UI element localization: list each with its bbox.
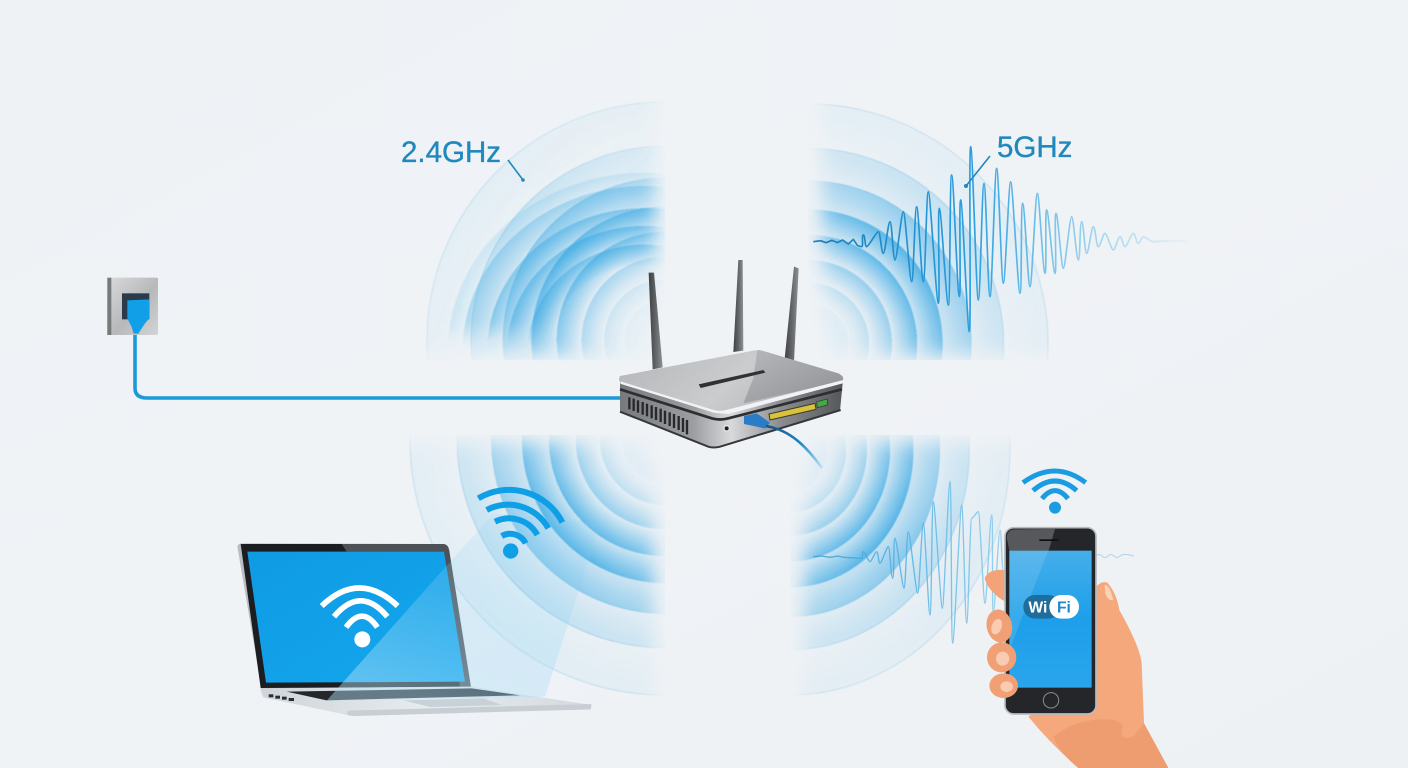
router green port — [817, 399, 827, 408]
laptop keyboard — [287, 688, 520, 700]
phone screen — [1009, 551, 1092, 688]
faint waveform tail right of phone — [1096, 554, 1134, 558]
Wi-Fi badge: Wi — [1028, 600, 1047, 617]
wifi icon above phone — [1023, 471, 1086, 514]
phone home button — [1043, 693, 1059, 708]
top finger — [985, 570, 1007, 603]
laptop ports — [269, 694, 294, 701]
laptop wifi icon — [322, 588, 398, 647]
floating wifi icon — [478, 490, 562, 559]
label: 2.4GHz: 2.4GHz — [401, 136, 501, 169]
router power socket — [723, 425, 730, 432]
phone-side signal arcs — [791, 435, 1011, 695]
router — [619, 260, 843, 447]
leader line: 2.4GHz — [508, 160, 525, 182]
router blue plug — [744, 413, 770, 429]
laptop-side signal arcs — [409, 435, 665, 696]
router top slot — [699, 370, 765, 388]
label: 5GHz: 5GHz — [997, 131, 1072, 164]
hand and thumb — [1028, 582, 1168, 768]
2.4GHz signal arcs — [426, 102, 665, 360]
Wi-Fi badge: Fi — [1057, 600, 1071, 617]
thumb nail — [1105, 585, 1113, 600]
label: 2.4GHz — [401, 136, 525, 182]
ethernet cable to wall — [135, 332, 622, 398]
Wi-Fi badge — [1023, 595, 1079, 619]
label: 5GHz — [964, 131, 1072, 188]
light beam from laptop — [327, 513, 600, 701]
phone speaker — [1039, 539, 1059, 541]
laptop lid — [237, 543, 471, 689]
antennas — [649, 260, 799, 369]
router blue cable — [766, 426, 822, 468]
laptop base — [260, 687, 592, 716]
router vents — [629, 397, 687, 434]
fingers — [983, 607, 1018, 698]
router top panel — [619, 350, 843, 411]
5GHz signal arcs — [809, 104, 1049, 360]
5GHz waveform — [813, 147, 1188, 332]
laptop — [237, 490, 600, 716]
router side panel — [620, 383, 843, 447]
phone in hand — [983, 471, 1168, 768]
wall socket — [107, 278, 158, 335]
leader line: 5GHz — [964, 156, 990, 188]
ethernet plug — [127, 299, 149, 334]
laptop trackpad — [403, 698, 502, 707]
router yellow ports — [769, 403, 816, 420]
laptop screen — [247, 552, 465, 683]
phone body — [1005, 528, 1096, 714]
phone-side waveform — [813, 482, 1003, 643]
